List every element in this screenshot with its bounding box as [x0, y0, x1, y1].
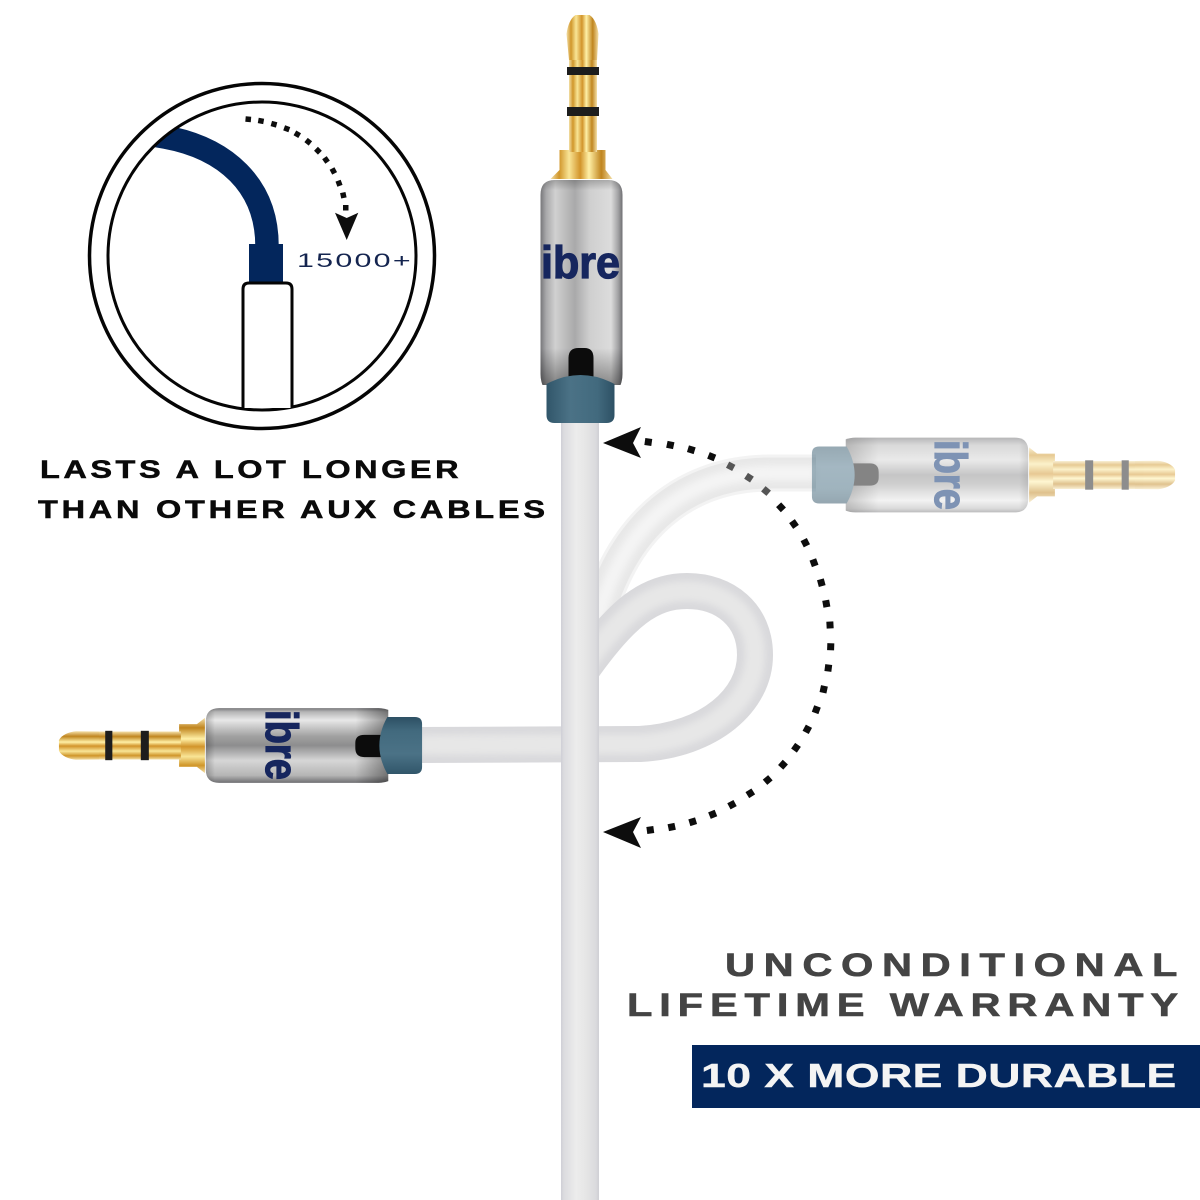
navy bent cable	[155, 128, 283, 282]
heading: lasts longer: LASTS A LOT LONGER	[40, 456, 459, 484]
brand logo: right plug: ibre	[925, 440, 976, 510]
arrow: dotted bend arc with two arrowheads	[603, 427, 834, 848]
heading: lifetime warranty: LIFETIME WARRANTY	[627, 987, 1178, 1023]
heading: lasts longer: THAN OTHER AUX CABLES	[38, 496, 545, 524]
heading: lifetime warranty: UNCONDITIONAL	[725, 947, 1177, 983]
brand logo: left plug: ibre	[256, 710, 307, 780]
heading: lasts longer	[38, 456, 545, 524]
banner: 10x more durable	[692, 1045, 1200, 1108]
top gold and silver plug	[540, 15, 622, 423]
left gold and silver plug	[59, 708, 422, 783]
panel: bend-test circle	[90, 84, 434, 428]
dotted arrow	[245, 116, 358, 240]
white connector	[243, 283, 292, 408]
banner: 10x more durable: 10 X MORE DURABLE	[701, 1058, 1176, 1095]
looped cable	[420, 591, 755, 745]
vertical cable	[561, 420, 599, 1200]
heading: lifetime warranty	[627, 947, 1178, 1023]
cycle count label: 15000+	[297, 251, 411, 271]
right faded plug: bent position	[812, 438, 1175, 512]
brand logo: top plug: ibre	[541, 237, 620, 288]
ghost cable: bent position	[596, 473, 816, 625]
